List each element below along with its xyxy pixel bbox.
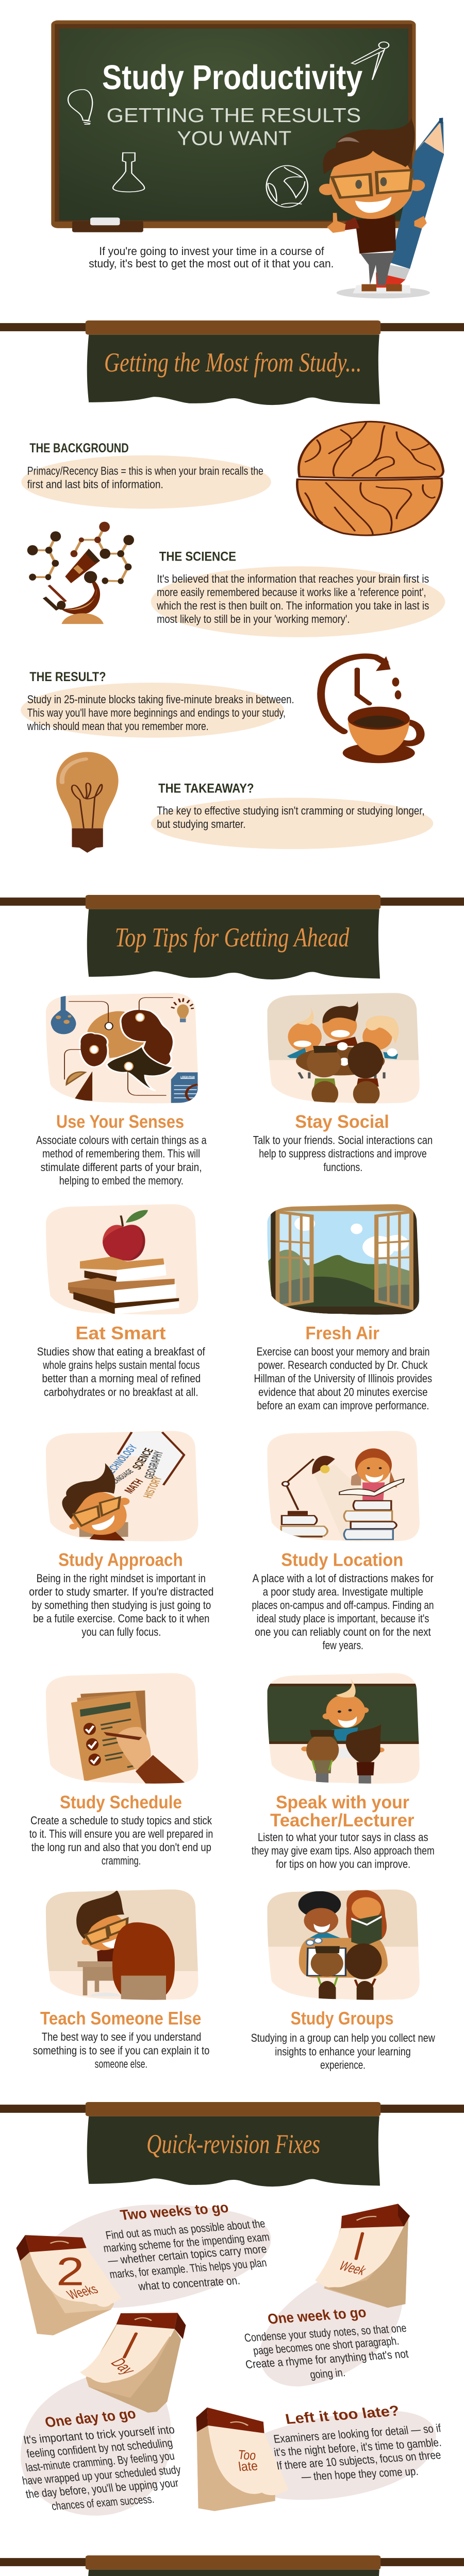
- heading: Fresh Air: [305, 1324, 379, 1343]
- panel: study schedule: [29, 1673, 213, 1867]
- icon: clock arrow and coffee cup: [321, 656, 421, 763]
- body text: Being in the right mindset is important in: [37, 1572, 206, 1585]
- panel: the background: [21, 440, 271, 509]
- subtitle: GETTING THE RESULTS: [107, 105, 361, 127]
- icon: calendar too late: late: [238, 2459, 259, 2474]
- heading: THE BACKGROUND: [29, 440, 129, 455]
- heading: Study Approach: [58, 1550, 183, 1570]
- illustration: boy with subjects from book: GEOGRAPHY: [142, 1450, 166, 1480]
- body text: Create a schedule to study topics and stick: [30, 1814, 212, 1827]
- panel: the science: [151, 549, 445, 637]
- body text: [254, 1345, 432, 1412]
- illustration: coloured brain: [46, 993, 200, 1105]
- illustration: open window: [267, 1204, 421, 1318]
- body text: what to concentrate on.: [137, 2274, 241, 2293]
- body text: first and last bits of information.: [27, 478, 163, 490]
- panel: the takeaway: [151, 781, 433, 849]
- blackboard: [51, 21, 416, 232]
- icon: chalk flask: [113, 153, 144, 192]
- illustration: boy with subjects from book: [46, 1431, 200, 1543]
- icon: brain: [297, 421, 443, 535]
- banner: References: [0, 2555, 464, 2576]
- body text: [243, 2321, 410, 2381]
- body text: — whether certain topics carry more: [107, 2243, 268, 2267]
- icon: chalk globe: [267, 165, 308, 207]
- body text: which should mean that you remember more.: [27, 720, 209, 733]
- heading: One day to go: [43, 2405, 138, 2430]
- body text: feeling confident by not scheduling: [26, 2436, 174, 2460]
- intro text: If you're going to invest your time in a course of: [99, 245, 324, 258]
- panel: two weeks to go: [16, 2199, 271, 2335]
- illustration: group study at table: [267, 1889, 421, 2002]
- body text: you can fully focus.: [81, 1625, 161, 1638]
- panel: the result: [21, 669, 294, 738]
- body text: [157, 804, 425, 831]
- illustration: boy with subjects from book: SCIENCE: [130, 1447, 156, 1471]
- panel: fresh air: [254, 1204, 432, 1412]
- icon: calendar 2 weeks: 2: [56, 2249, 85, 2294]
- body text: to it. This will ensure you are well prepared in: [29, 1827, 213, 1840]
- heading: [270, 1793, 415, 1831]
- heading: THE RESULT?: [29, 669, 106, 684]
- icon: compass: [352, 42, 389, 80]
- body text: Studies show that eating a breakfast of: [37, 1345, 205, 1358]
- illustration: friends at table: [267, 993, 421, 1106]
- body text: experience.: [320, 2058, 366, 2071]
- heading: THE SCIENCE: [159, 549, 236, 564]
- panel: one day to go: [21, 2313, 186, 2516]
- illustration: boy teaching girl: [46, 1889, 200, 2002]
- banner: Quick-revision Fixes: [0, 2102, 464, 2187]
- body text: [37, 1345, 205, 1398]
- heading: Study Location: [281, 1550, 403, 1570]
- heading: Two weeks to go: [119, 2199, 230, 2223]
- heading: Eat Smart: [75, 1324, 165, 1343]
- body text: [21, 2423, 182, 2513]
- body text: but studying smarter.: [157, 818, 245, 831]
- body text: [251, 2031, 435, 2071]
- body text: better than a morning meal of refined: [42, 1372, 201, 1385]
- body text: have wrapped up your scheduled study: [21, 2463, 182, 2487]
- icon: calendar 1 week: [315, 2204, 410, 2308]
- illustration: boy with subjects from book: HISTORY: [141, 1475, 165, 1499]
- subtitle: YOU WANT: [177, 127, 291, 149]
- panel: left it too late: [196, 2402, 442, 2511]
- body text: [252, 1831, 435, 1870]
- heading: THE TAKEAWAY?: [158, 781, 254, 795]
- icon: calendar 1 week: Week: [336, 2259, 369, 2278]
- body text: The best way to see if you understand: [42, 2030, 201, 2043]
- illustration: girl reading with lamp: [267, 1431, 421, 1549]
- panel: stay social: [253, 993, 433, 1174]
- heading: Study Groups: [291, 2009, 393, 2029]
- body text: [29, 1814, 213, 1867]
- body text: [27, 693, 294, 733]
- illustration: boy with subjects from book: LANGUAGE: [110, 1468, 136, 1485]
- body text: chances of exam success.: [51, 2493, 155, 2513]
- body text: going in.: [309, 2366, 346, 2381]
- illustration: checklist and hand: [46, 1673, 200, 1785]
- illustration: boy with subjects from book: TECHNOLOGY: [102, 1443, 140, 1478]
- body text: Associate colours with certain things as a: [36, 1134, 207, 1146]
- illustration: coloured brain: LOREM IPSUM: [180, 1076, 195, 1079]
- illustration: teacher and students: [267, 1673, 421, 1785]
- icon: calendar too late: [196, 2408, 289, 2511]
- body text: [253, 1134, 433, 1174]
- body text: [29, 1572, 213, 1638]
- icon: calendar too late: Too: [237, 2448, 257, 2463]
- panel: study groups: [251, 1889, 435, 2071]
- heading: One week to go: [267, 2304, 368, 2327]
- body text: last-minute cramming. By feeling you: [25, 2450, 176, 2474]
- body text: Primacy/Recency Bias = this is when your brain recalls the: [27, 465, 263, 478]
- body text: [273, 2422, 442, 2483]
- panel: one week to go: [243, 2204, 410, 2386]
- body text: the day before, you'll be upping your: [25, 2477, 179, 2501]
- icon: light bulb: [56, 752, 119, 853]
- body text: someone else.: [95, 2057, 147, 2070]
- icon: calendar 1 day: [80, 2313, 186, 2413]
- body text: [103, 2217, 271, 2293]
- body text: marks, for example. This helps you plan: [108, 2257, 268, 2281]
- icon: calendar 1 day: Day: [106, 2356, 140, 2377]
- body text: [157, 572, 429, 625]
- body text: [33, 2030, 209, 2070]
- heading: Study Schedule: [60, 1793, 182, 1812]
- body text: It's important to trick yourself into: [23, 2423, 176, 2447]
- banner: Getting the Most from Study: [0, 320, 464, 405]
- body text: Find out as much as possible about the: [105, 2217, 266, 2242]
- illustration: boy with pencil: [319, 118, 444, 298]
- body text: be a futile exercise. Come back to it when: [33, 1612, 209, 1625]
- icon: microscope and molecules: [27, 522, 134, 624]
- banner: Top Tips for Getting Ahead: [0, 895, 464, 979]
- heading: Use Your Senses: [56, 1112, 184, 1132]
- body text: by something then studying is just going to: [31, 1599, 211, 1612]
- heading: Teach Someone Else: [40, 2009, 201, 2029]
- icon: calendar 2 weeks: [16, 2235, 121, 2335]
- panel: hero blackboard and character: [51, 21, 444, 298]
- panel: eat smart: [37, 1204, 205, 1398]
- body text: functions.: [323, 1161, 362, 1174]
- body text: [252, 1572, 434, 1652]
- body text: the long run and also that you don't end up: [31, 1841, 211, 1854]
- panel: use your senses: [36, 993, 207, 1187]
- body text: [36, 1134, 207, 1187]
- body text: order to study smarter. If you're distracted: [29, 1585, 213, 1598]
- panel: study approach: [29, 1431, 213, 1638]
- subtitle: [107, 105, 361, 149]
- icon: calendar 2 weeks: Weeks: [64, 2282, 101, 2302]
- illustration: apple on books: [46, 1204, 200, 1316]
- body text: carbohydrates or no breakfast at all.: [44, 1385, 198, 1398]
- body text: whole grains helps sustain mental focus: [43, 1359, 200, 1371]
- body text: something is to see if you can explain it to: [33, 2044, 209, 2057]
- body text: [27, 465, 263, 490]
- heading: Left it too late?: [284, 2402, 401, 2427]
- intro text: study, it's best to get the most out of it that you can.: [89, 257, 334, 270]
- body text: stimulate different parts of your brain,: [41, 1161, 202, 1174]
- body text: few years.: [323, 1639, 363, 1652]
- illustration: boy with subjects from book: MATH: [122, 1477, 146, 1495]
- intro text: [89, 245, 334, 270]
- panel: study location: [252, 1431, 434, 1652]
- panel: teach someone else: [33, 1889, 209, 2070]
- body text: method of remembering them. This will: [42, 1147, 200, 1160]
- body text: marking scheme for the impending exam: [103, 2231, 271, 2255]
- body text: helping to embed the memory.: [59, 1174, 184, 1187]
- body text: cramming.: [102, 1854, 141, 1867]
- heading: Stay Social: [295, 1112, 389, 1132]
- panel: speak with your teacher: [252, 1673, 435, 1870]
- icon: chalk bulb: [68, 90, 92, 124]
